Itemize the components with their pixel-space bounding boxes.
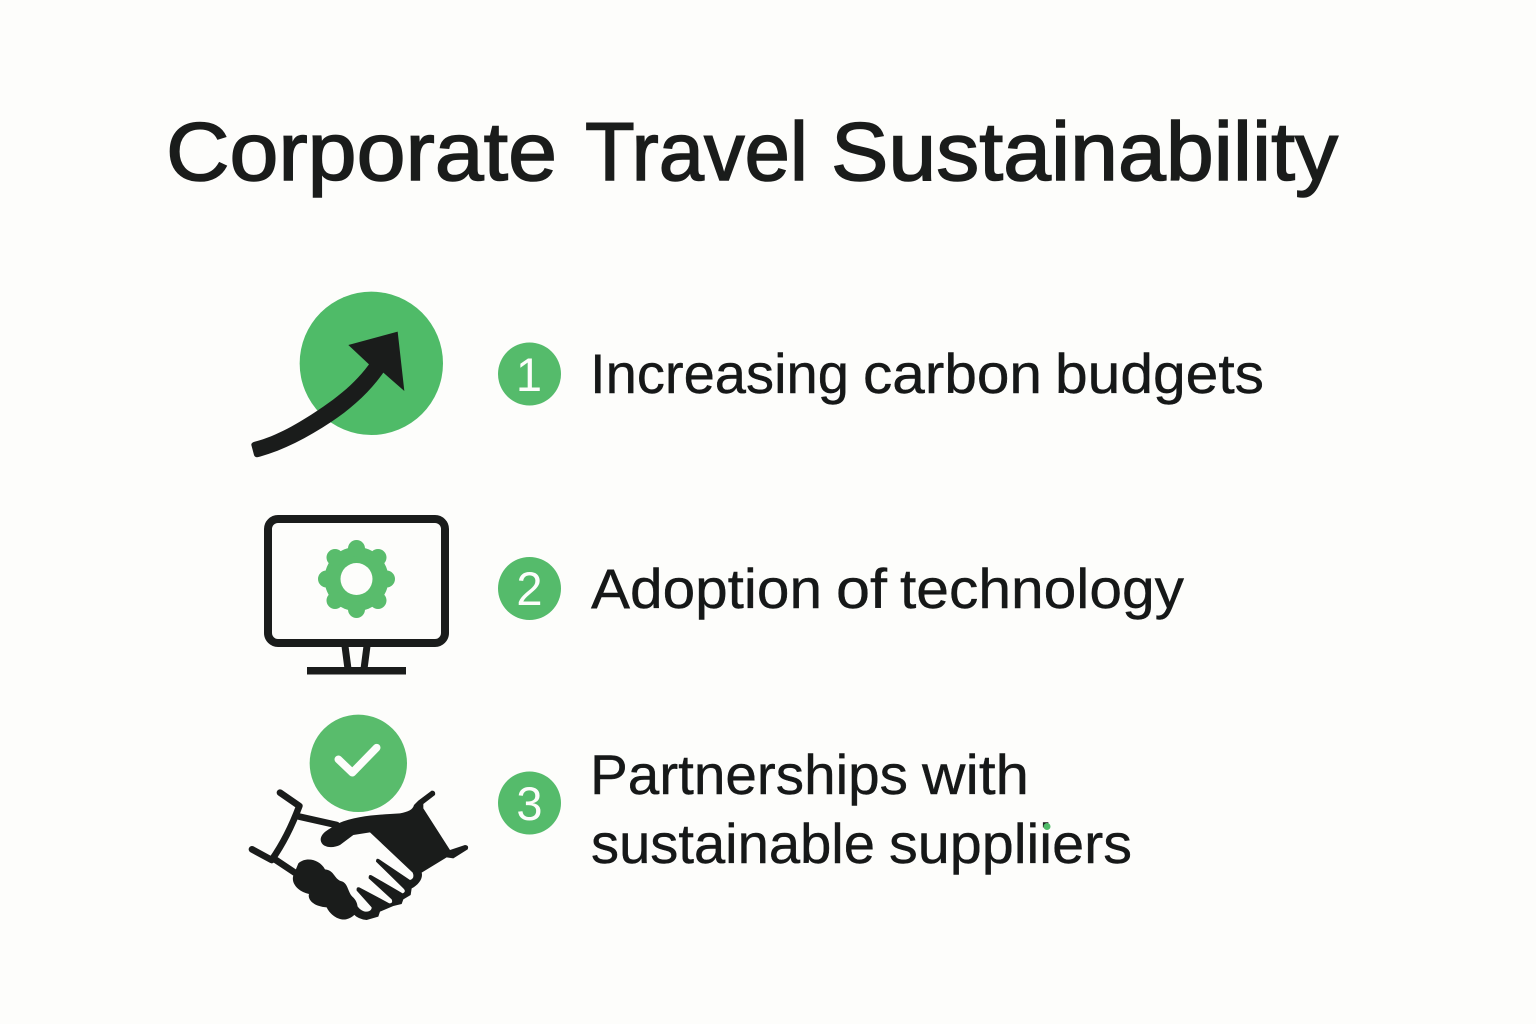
title xyxy=(166,105,1339,198)
item 2 text: technology xyxy=(900,557,1184,620)
left cuff outline xyxy=(252,793,337,875)
item 1 text: carbon xyxy=(863,342,1042,405)
left bumpy glove xyxy=(293,860,358,919)
title: Sustainability xyxy=(831,105,1339,198)
item 1 text: budgets xyxy=(1055,342,1264,405)
icon: handshake with green check xyxy=(252,715,468,920)
item 3 text: Partnerships xyxy=(590,743,908,806)
right hand and sleeve xyxy=(321,791,468,920)
item 3 text: with xyxy=(921,743,1029,806)
item 2 text: Adoption xyxy=(591,557,822,620)
number badge 1: 1 xyxy=(516,348,542,401)
number badge 2: 2 xyxy=(516,562,543,615)
icon: check circle xyxy=(310,715,407,812)
item 3 text: sustainable xyxy=(591,812,875,875)
item 1 text xyxy=(590,342,1264,405)
number badge 3 xyxy=(498,772,561,834)
item 2 text xyxy=(591,557,1184,620)
icon: monitor with gear xyxy=(268,519,445,674)
number badge 1 xyxy=(498,342,561,406)
item 3 text xyxy=(590,743,1132,875)
item 3 text: suppliiers xyxy=(889,812,1132,875)
number badge 2 xyxy=(498,557,561,620)
icon: upward arrow over green circle xyxy=(251,292,443,457)
title: Travel xyxy=(585,105,808,198)
title: Corporate xyxy=(166,105,557,198)
number badge 3: 3 xyxy=(516,777,543,830)
item 1 text: Increasing xyxy=(590,342,849,405)
item 2 text: of xyxy=(836,557,887,620)
white open hand with fingers xyxy=(330,832,413,912)
icon: gear xyxy=(318,540,395,618)
